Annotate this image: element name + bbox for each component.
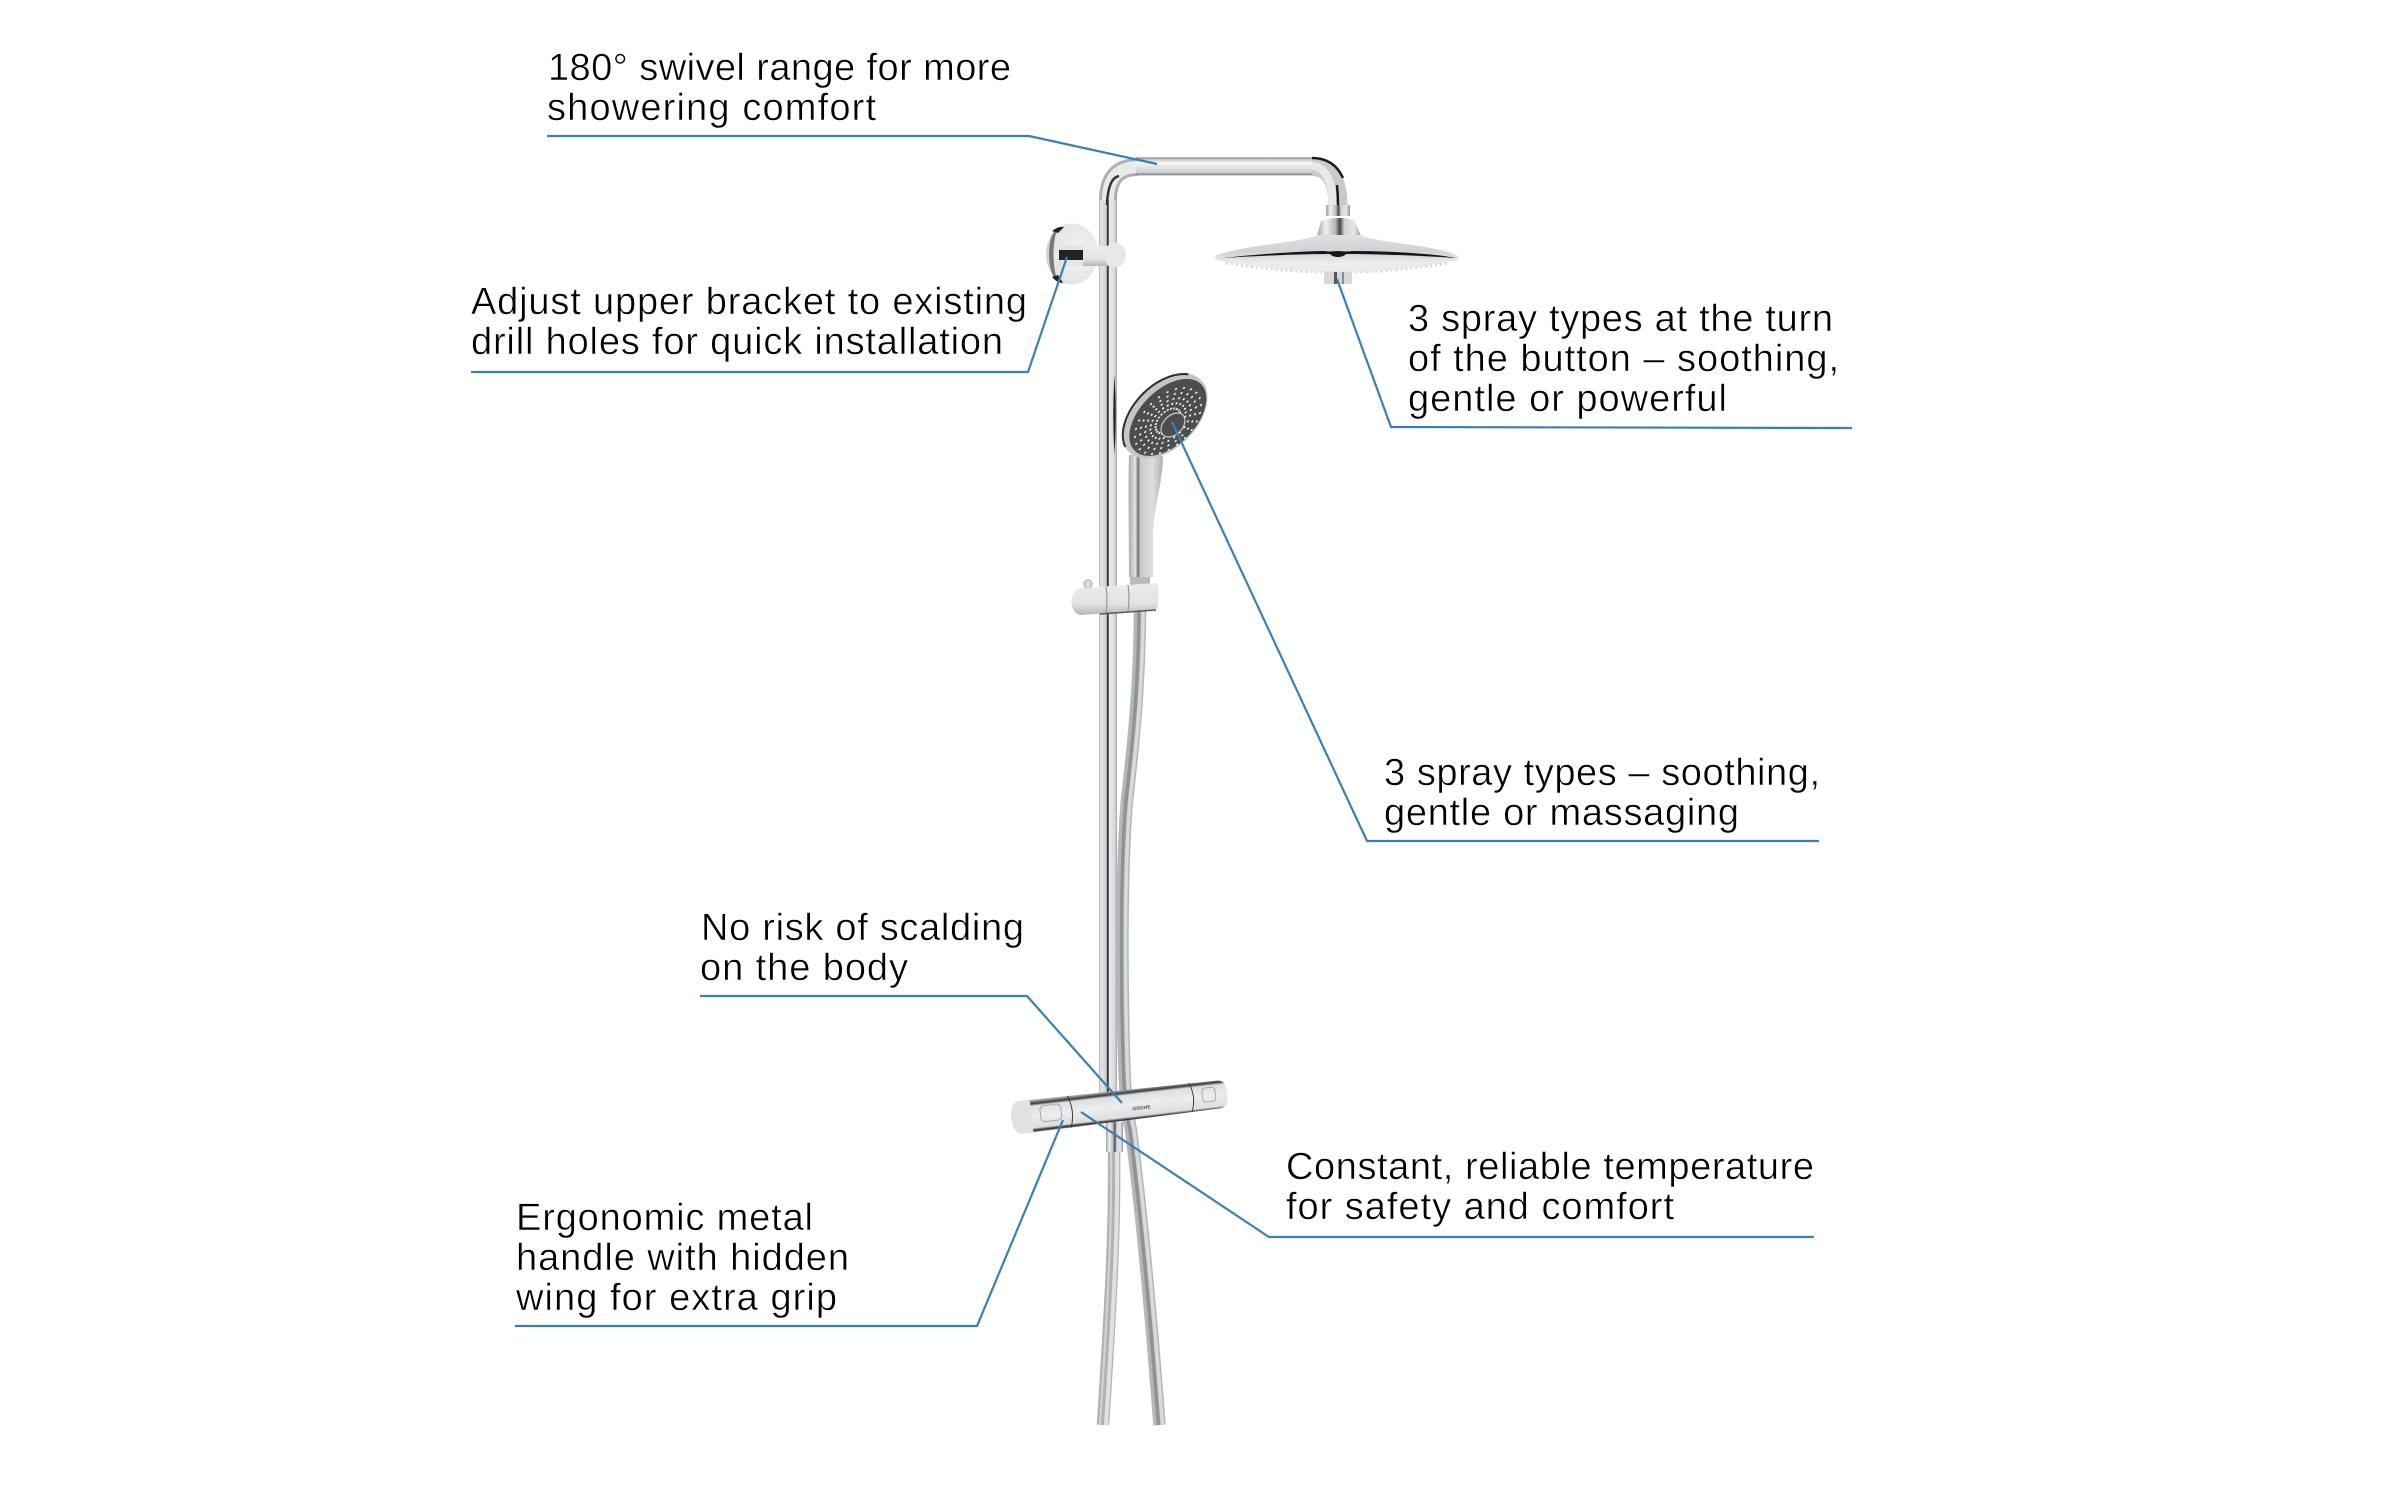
callout: overhead spray types — [1408, 298, 1839, 420]
leader line: temperature — [1081, 1112, 1814, 1237]
thermostat body — [1009, 1077, 1229, 1135]
callout: overhead spray types: 3 spray types at the turn — [1408, 298, 1833, 340]
callout: ergonomic handle: Ergonomic metal — [516, 1197, 813, 1239]
callout: upper bracket: Adjust upper bracket to existing — [471, 281, 1027, 323]
callout: hand shower spray types: 3 spray types – soothing, — [1384, 752, 1820, 794]
leader line: no scalding — [700, 996, 1122, 1103]
callout: constant temperature: for safety and comfort — [1286, 1186, 1674, 1228]
shower rail and arm — [1099, 158, 1343, 1105]
leader line: handle — [515, 1120, 1063, 1326]
callout: no scalding: No risk of scalding — [701, 907, 1024, 949]
callout: no scalding: on the body — [700, 947, 908, 989]
callout: swivel range — [547, 47, 1011, 129]
callout: constant temperature — [1286, 1146, 1814, 1228]
callout: constant temperature: Constant, reliable temperature — [1286, 1146, 1814, 1188]
callout: hand shower spray types — [1384, 752, 1820, 834]
callout: swivel range: showering comfort — [547, 87, 876, 129]
handle — [1129, 455, 1163, 577]
callout: ergonomic handle: handle with hidden — [516, 1237, 849, 1279]
callout: overhead spray types: gentle or powerful — [1408, 378, 1727, 420]
hose to hand shower — [1121, 605, 1162, 1425]
callout: hand shower spray types: gentle or massaging — [1384, 792, 1739, 834]
callout: no scalding — [700, 907, 1024, 989]
callout: ergonomic handle: wing for extra grip — [515, 1277, 837, 1319]
wall bracket — [1046, 224, 1126, 284]
left control handle — [1009, 1100, 1033, 1135]
leader line: overhead head button — [1337, 279, 1852, 428]
sliding bracket — [1072, 580, 1159, 615]
spray face — [1106, 357, 1224, 475]
leader line: swivel arm — [547, 136, 1157, 164]
callout: upper bracket: drill holes for quick installation — [471, 321, 1003, 363]
hand shower — [1106, 357, 1224, 586]
callout: swivel range: 180° swivel range for more — [548, 47, 1011, 89]
shower system product illustration — [1009, 158, 1459, 1425]
overhead shower head — [1215, 205, 1459, 284]
leader line: upper bracket — [471, 257, 1067, 372]
spray nozzles — [1118, 371, 1218, 471]
callout: upper bracket — [471, 281, 1027, 363]
lower hose connector and hose — [1100, 1122, 1123, 1425]
leader line: hand shower — [1172, 422, 1819, 841]
centre button — [1156, 408, 1190, 442]
callout: ergonomic handle — [515, 1197, 849, 1319]
callout: overhead spray types: of the button – soothing, — [1408, 338, 1839, 380]
right control handle — [1202, 1087, 1216, 1102]
logo: GROHE — [1132, 1104, 1152, 1112]
